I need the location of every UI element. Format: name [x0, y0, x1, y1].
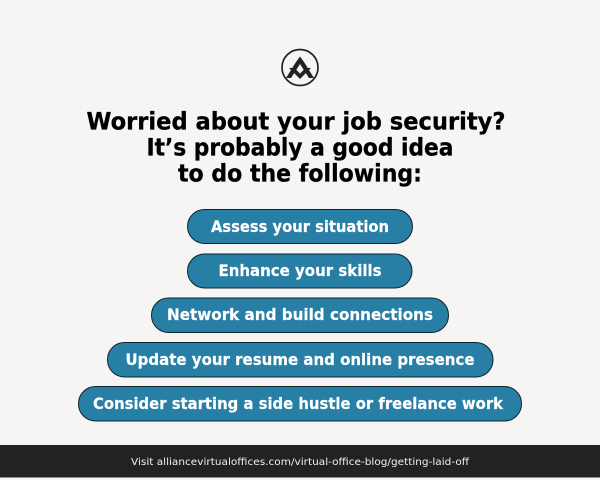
title: Worried about your job security? — [86, 108, 506, 136]
button: skills: Enhance your skills — [218, 261, 382, 280]
title — [86, 108, 506, 188]
button: assess: Assess your situation — [211, 217, 389, 236]
button: skills — [188, 254, 412, 288]
footer bar: Visit alliancevirtualoffices.com/virtual-office-blog/getting-laid-off — [131, 457, 470, 468]
title: to do the following: — [178, 160, 422, 188]
title: It’s probably a good idea — [146, 134, 454, 162]
button: resume: Update your resume and online presence — [126, 350, 475, 369]
icon: logo — [282, 50, 318, 86]
button: network — [152, 298, 448, 332]
button: side hustle: Consider starting a side hustle or freelance work — [93, 394, 503, 413]
button: network: Network and build connections — [167, 305, 433, 324]
button: assess — [188, 210, 412, 244]
footer bar — [0, 445, 600, 478]
button: resume — [108, 342, 493, 377]
button: side hustle — [78, 386, 522, 421]
